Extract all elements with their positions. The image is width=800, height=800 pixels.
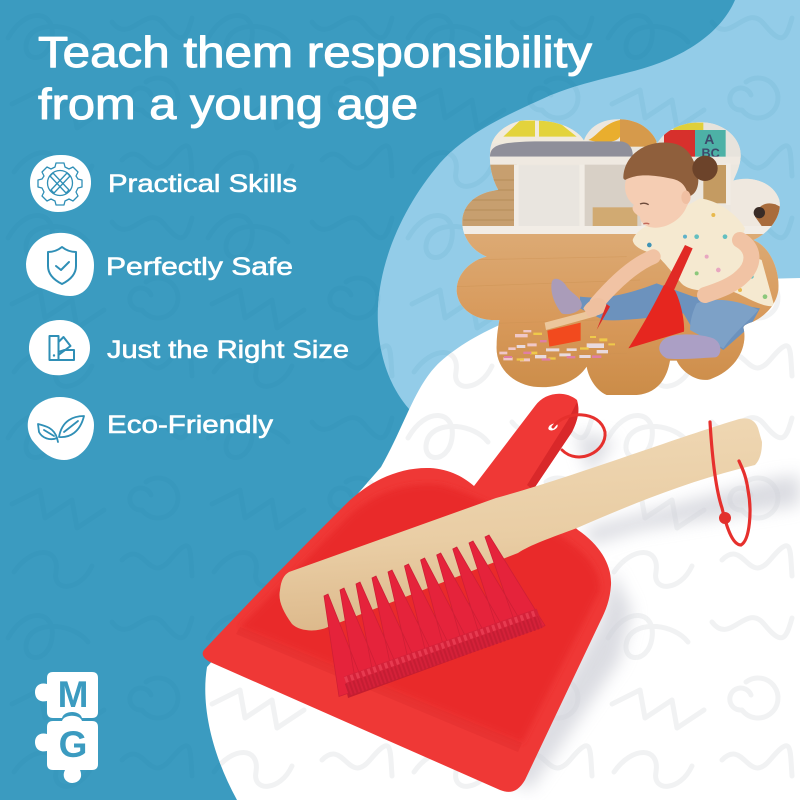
logo: MG puzzle pieces <box>35 672 98 783</box>
brush bristles <box>324 535 545 698</box>
label: Perfectly Safe <box>106 253 293 281</box>
wooden floor <box>456 234 778 395</box>
feature: Eco-Friendly <box>28 397 274 460</box>
feature: Practical Skills <box>30 155 297 212</box>
icon: leaves <box>28 397 94 460</box>
logo: MG puzzle pieces: M <box>58 674 88 715</box>
feature: Just the Right Size <box>29 320 349 375</box>
brush wooden handle <box>280 418 762 630</box>
child's legs <box>551 279 760 359</box>
photo: child sweeping in flower-shaped frame <box>456 119 780 395</box>
background: white wave <box>205 278 800 800</box>
title: from a young age <box>38 80 418 129</box>
label: Eco-Friendly <box>107 411 274 439</box>
icon: shield with check <box>26 233 94 296</box>
brush cord <box>710 422 750 545</box>
title: Teach them responsibility <box>38 28 592 77</box>
child's head and hair <box>623 142 718 228</box>
dustpan <box>203 394 611 792</box>
dustpan and brush product <box>203 394 800 792</box>
brush in photo <box>545 298 610 347</box>
child's torso and arms <box>597 198 774 306</box>
icon: gear with tools <box>30 155 91 212</box>
icon: colour swatch <box>29 320 90 375</box>
background: light blue wave <box>378 0 800 412</box>
cord knot <box>719 512 731 524</box>
red dustpan in photo <box>628 245 693 348</box>
title <box>38 28 592 129</box>
dustpan cord <box>553 415 605 457</box>
label: Practical Skills <box>108 170 297 198</box>
label: Just the Right Size <box>107 336 349 364</box>
shelf and toys background: A <box>704 131 714 147</box>
shelf and toys background <box>453 117 787 235</box>
feature: Perfectly Safe <box>26 233 293 296</box>
product shadows <box>510 432 800 790</box>
logo: MG puzzle pieces: G <box>59 724 87 765</box>
confetti <box>499 330 615 361</box>
shelf and toys background: BC <box>702 146 720 160</box>
